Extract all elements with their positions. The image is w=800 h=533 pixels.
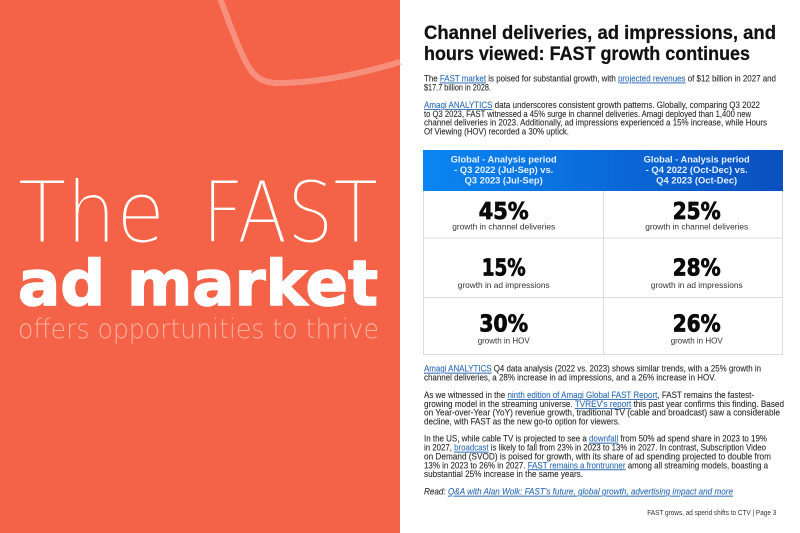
cell: 45%: growth in channel deliveries [452,222,555,232]
US paragraph: in 2027, broadcast is likely to fall from 23% in 2023 to 13% in 2027. In contrast, Subscription Video [424,443,766,453]
US paragraph: 13% in 2023 to 26% in 2027. FAST remains a frontrunner among all streaming models, boasting a [424,460,768,470]
Q4 paragraph [424,364,761,383]
cell: 28%: 28% [673,256,721,282]
table header: Q4 2023 (Oct-Dec) [656,176,737,186]
analytics paragraph [424,100,768,136]
cell: 30%: 30% [479,312,528,338]
report paragraph: As we witnessed in the ninth edition of Amagi Global FAST Report, FAST remains the fastest- [424,390,754,400]
heading [424,22,776,65]
cell: 25%: growth in channel deliveries [645,222,748,232]
cell: 28%: growth in ad impressions [651,280,743,290]
cell: 45%: 45% [479,199,529,225]
heading: Channel deliveries, ad impressions, and [424,22,776,44]
cover subtitle: offers opportunities to thrive [18,314,379,345]
decorative curve [220,0,400,83]
analytics paragraph: Amagi ANALYTICS data underscores consistent growth patterns. Globally, comparing Q3 2022 [424,100,760,110]
report paragraph: decline, with FAST as the new go-to option for viewers. [424,416,620,426]
heading: hours viewed: FAST growth continues [424,43,750,65]
report paragraph: growing model in the streaming universe. TVREV's report this past year confirms this finding. Based [424,399,784,409]
cover title: The FAST: The [18,164,165,263]
cell: 25% [645,199,748,232]
cell: 45% [452,199,555,232]
cell: 15%: 15% [482,256,526,282]
cell: 26% [671,312,723,346]
intro paragraph [424,74,776,92]
table header: Q3 2023 (Jul-Sep) [465,176,543,186]
Q4 paragraph: channel deliveries, a 28% increase in ad impressions, and a 26% increase in HOV. [424,373,716,383]
table header: Global - Analysis period [644,154,750,164]
cell: 15% [458,256,550,290]
read link: Read: Q&A with Alan Wolk: FAST's future, global growth, advertising impact and more [424,487,733,497]
analytics paragraph: channel deliveries in 2023. Additionally, ad impressions experienced a 15% increase, while Hours [424,118,768,128]
table header: Global - Analysis period [451,154,557,164]
page footer: FAST grows, ad spend shifts to CTV | Page 3 [647,508,776,517]
US paragraph: on Demand (SVOD) is poised for growth, with its share of ad spending projected to double from [424,451,771,461]
US paragraph [424,434,771,479]
US paragraph: substantial 25% increase in the same years. [424,469,583,479]
intro paragraph: The FAST market is poised for substantial growth, with projected revenues of $12 billion in 2027 and [424,74,776,84]
cover title: The FAST: FAST [202,164,378,263]
cover title: The FAST [18,164,378,263]
panel: left cover [0,0,400,533]
Q4 paragraph: Amagi ANALYTICS Q4 data analysis (2022 vs. 2023) shows similar trends, with a 25% growth in [424,364,761,374]
analytics paragraph: Of Viewing (HOV) recorded a 30% uptick. [424,126,569,136]
report paragraph [424,390,784,426]
table header: - Q4 2022 (Oct-Dec) vs. [646,165,748,175]
cover title: ad market: ad market [18,247,378,320]
table header: - Q3 2022 (Jul-Sep) vs. [454,165,553,175]
report paragraph: on Year-over-Year (YoY) revenue growth, traditional TV (cable and broadcast) saw a considerable [424,408,780,418]
cell: 26%: 26% [673,312,721,338]
analytics paragraph: to Q3 2023, FAST witnessed a 45% surge in channel deliveries. Amagi deployed than 1,400 new [424,109,751,119]
cell: 30%: growth in HOV [478,336,530,346]
intro paragraph: $17.7 billion in 2028. [424,82,491,92]
US paragraph: In the US, while cable TV is projected to see a downfall from 50% ad spend share in 2023 to 19% [424,434,767,444]
cell: 15%: growth in ad impressions [458,280,550,290]
cell: 26%: growth in HOV [671,336,723,346]
growth table [423,150,783,354]
table header [423,150,783,191]
cell: 28% [651,256,743,290]
cell: 25%: 25% [673,199,721,225]
